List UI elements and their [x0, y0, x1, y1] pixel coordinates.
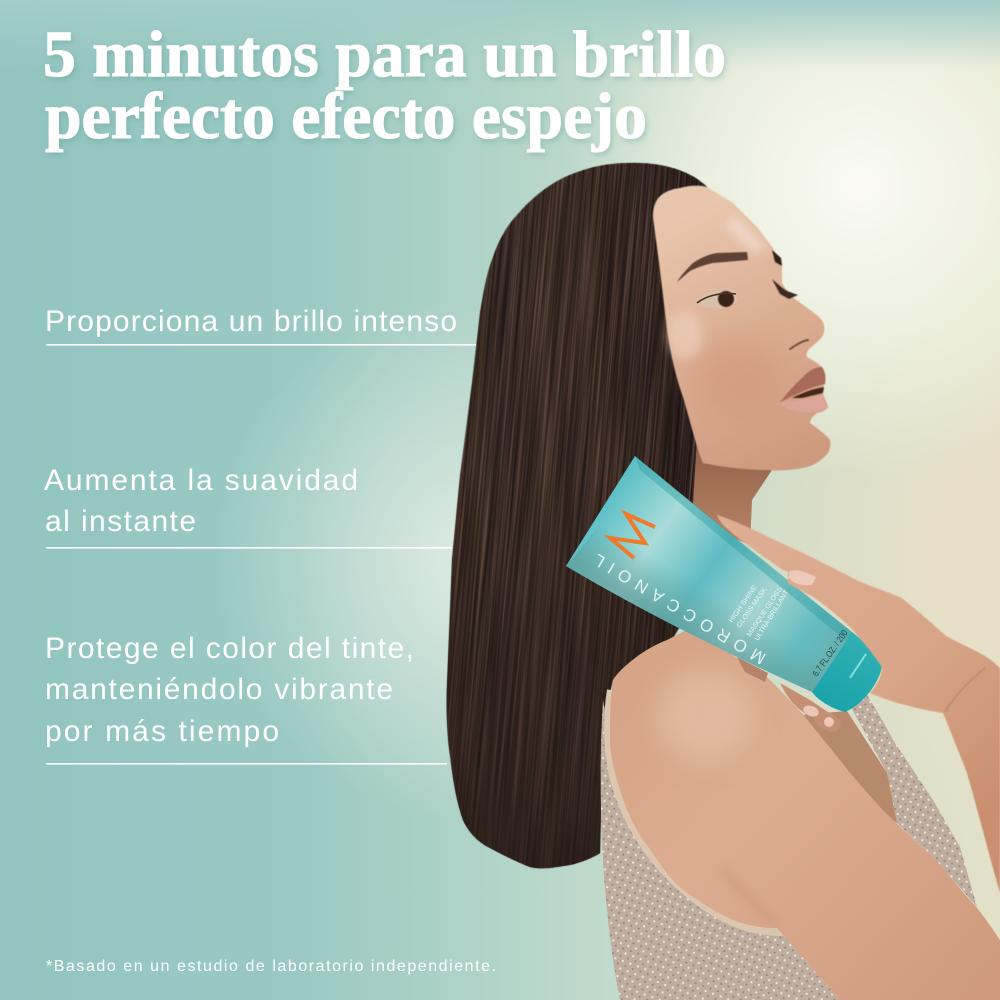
- lower fingers: [780, 683, 841, 732]
- benefit: color: [45, 632, 447, 765]
- product name: GLOSS MASK: [736, 586, 769, 629]
- lips: [780, 367, 828, 412]
- forehead highlight: [725, 215, 768, 252]
- armhole shadow skin: [800, 711, 897, 823]
- nostril: [790, 340, 808, 349]
- photo: woman holding product: [446, 162, 1000, 1000]
- near eye: [693, 290, 737, 308]
- benefit: color: Protege el color del tinte,: [45, 632, 414, 665]
- product name: [728, 584, 791, 642]
- logo M: [610, 514, 655, 558]
- product name: HIGH SHINE: [728, 584, 759, 624]
- far eyebrow: [772, 250, 782, 266]
- size: 6.7 FL.OZ. / 200: [810, 628, 850, 678]
- thumbnail: [789, 570, 816, 585]
- hair: [446, 162, 708, 870]
- brand name: MOROCCANOIL: [590, 550, 769, 668]
- finger behind tube: [737, 657, 768, 682]
- shoulder and arm: [610, 628, 1000, 1000]
- wrist crease: [945, 668, 985, 712]
- benefit: color: manteniéndolo vibrante: [45, 673, 393, 706]
- tube: [566, 456, 882, 712]
- product name: ULTRA-BRILLANT: [754, 589, 791, 642]
- face: [653, 186, 830, 470]
- title: perfecto efecto espejo: [45, 80, 647, 153]
- hand and forearm: [717, 515, 1000, 893]
- dress: far side panel with beads: [847, 695, 977, 907]
- near eyebrow: [677, 252, 748, 282]
- tube cap: [812, 632, 882, 712]
- far eye: [772, 279, 798, 299]
- title: [43, 18, 726, 153]
- armpit shadow: [722, 868, 777, 925]
- benefit: suavidad: [44, 464, 452, 549]
- dress neckline trim: [608, 690, 785, 932]
- neck: [692, 440, 772, 545]
- dress: front panel with beads: [601, 700, 840, 1000]
- benefit: suavidad: al instante: [45, 505, 196, 538]
- title: 5 minutos para un brillo: [43, 18, 726, 91]
- benefit: color: por más tiempo: [45, 715, 279, 748]
- benefit: suavidad: Aumenta la suavidad: [44, 464, 358, 497]
- cheek highlight: [667, 311, 703, 359]
- cheek blush: [693, 337, 777, 413]
- benefit: brillo: Proporciona un brillo intenso: [45, 305, 457, 338]
- product name: MASQUE GLOSS: [746, 586, 784, 638]
- shoulder highlight: [657, 670, 753, 760]
- footnote: *Basado en un estudio de laboratorio independiente.: [46, 958, 496, 975]
